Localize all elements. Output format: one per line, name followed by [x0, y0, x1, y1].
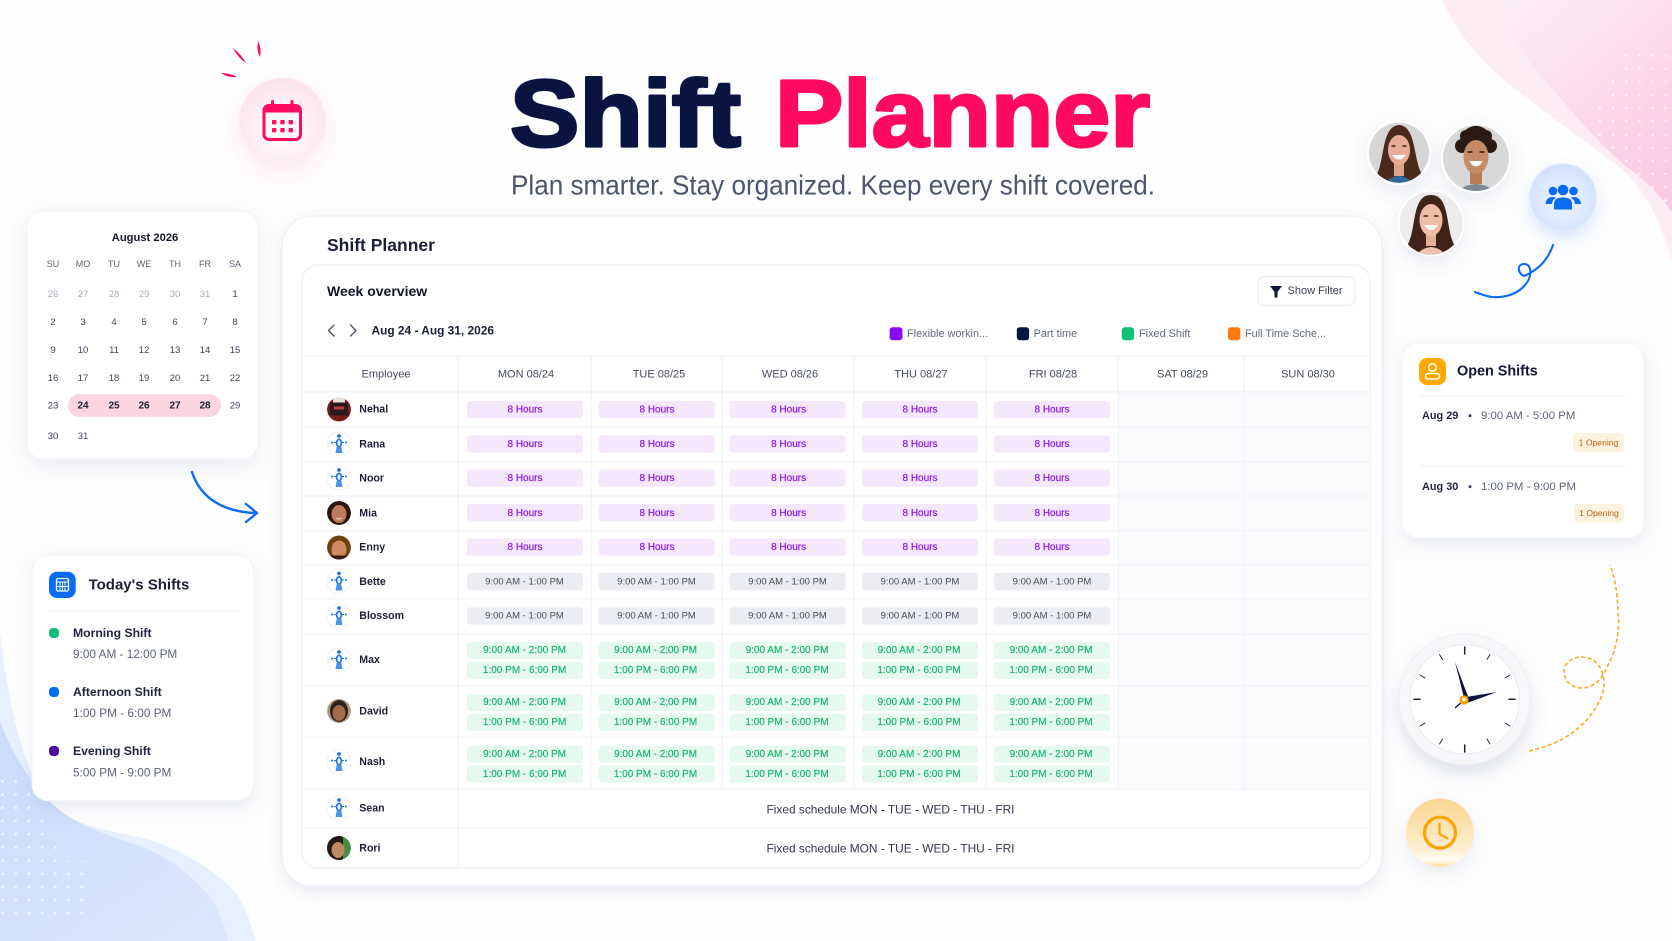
row: Nehal	[327, 398, 1110, 422]
row: David: 9:00 AM - 2:00 PM	[746, 697, 828, 708]
row: David	[327, 694, 1110, 731]
row: Blossom: 9:00 AM - 1:00 PM	[617, 610, 696, 622]
calendar dates: 22	[230, 373, 240, 384]
open shift: Aug 29	[1422, 410, 1624, 452]
open shift: Aug 29: 9:00 AM - 5:00 PM	[1481, 410, 1575, 422]
row: David: 9:00 AM - 2:00 PM	[878, 697, 960, 708]
row: Max: 1:00 PM - 6:00 PM	[745, 665, 829, 676]
row: Enny	[327, 536, 1110, 560]
legend: Fixed Shift	[1139, 328, 1190, 340]
heading: Today's Shifts	[89, 576, 189, 594]
row: Rori	[327, 836, 1014, 860]
arrow: orange dashed loop	[1529, 565, 1619, 751]
subtitle: Plan smarter. Stay organized. Keep every shift covered.	[511, 170, 1155, 200]
open shift: Aug 30: 1 Opening	[1579, 508, 1619, 518]
row: Nehal: Nehal	[359, 404, 388, 416]
table header: THU 08/27	[894, 368, 948, 380]
row: Rana: 8 Hours	[902, 439, 938, 450]
row: Nash: 1:00 PM - 6:00 PM	[614, 769, 697, 780]
weekday labels: SU	[47, 259, 59, 269]
row: Max: 9:00 AM - 2:00 PM	[614, 645, 697, 656]
row: Enny: 8 Hours	[639, 542, 675, 553]
row: Noor: 8 Hours	[902, 473, 938, 484]
calendar dates: 16	[48, 373, 58, 384]
row: Max: 1:00 PM - 6:00 PM	[877, 665, 961, 676]
calendar dates: 17	[78, 373, 88, 384]
calendar dates: 18	[109, 373, 119, 384]
row: Bette: 9:00 AM - 1:00 PM	[748, 576, 827, 587]
calendar dates: 2	[50, 317, 56, 328]
row: Blossom: 9:00 AM - 1:00 PM	[748, 610, 827, 622]
row: Enny: 8 Hours	[771, 542, 806, 553]
row: Noor	[327, 466, 1110, 490]
table header: Employee	[362, 368, 410, 380]
panel: week overview	[302, 265, 1370, 868]
row: Blossom: Blossom	[359, 610, 404, 622]
morning shift: 9:00 AM - 12:00 PM	[73, 647, 177, 661]
calendar dates: 31	[200, 289, 210, 300]
calendar dates: 25	[108, 400, 120, 412]
row: Nash: 1:00 PM - 6:00 PM	[745, 769, 829, 780]
calendar dates: 19	[139, 373, 149, 384]
calendar dates: 28	[109, 289, 119, 300]
row: Noor: Noor	[359, 472, 384, 484]
afternoon shift	[49, 685, 171, 720]
table header	[362, 368, 1335, 380]
panel: Shift Planner main	[282, 216, 1382, 886]
weekday labels: TU	[108, 259, 120, 269]
row: David: 1:00 PM - 6:00 PM	[877, 717, 961, 728]
panel: Open Shifts	[1402, 343, 1644, 538]
row: Rori: Fixed schedule MON - TUE - WED - THU - FRI	[767, 842, 1014, 856]
evening shift: 5:00 PM - 9:00 PM	[73, 766, 171, 780]
row: Mia: Mia	[359, 507, 377, 519]
icon: pink calendar badge	[221, 41, 326, 164]
avatar: woman two	[1398, 190, 1466, 260]
weekday labels	[47, 259, 241, 269]
calendar dates: 27	[78, 289, 88, 300]
row: Noor: 8 Hours	[639, 473, 675, 484]
row: Max: 1:00 PM - 6:00 PM	[614, 665, 697, 676]
table header: SAT 08/29	[1157, 368, 1208, 380]
open shift: Aug 30: Aug 30	[1422, 481, 1458, 493]
row: Rana: 8 Hours	[771, 439, 806, 450]
morning shift	[49, 626, 177, 661]
row: David: 1:00 PM - 6:00 PM	[483, 717, 566, 728]
row: Nash	[327, 746, 1110, 782]
icon: wall clock	[1399, 634, 1530, 765]
icon: team badge	[1530, 164, 1596, 230]
selected week highlight	[68, 394, 221, 417]
row: Nash: 9:00 AM - 2:00 PM	[1010, 749, 1092, 760]
show filter button: Show Filter	[1288, 285, 1343, 297]
row: Mia: 8 Hours	[1034, 508, 1070, 519]
row: Sean	[327, 796, 1014, 820]
row: Nash: 9:00 AM - 2:00 PM	[483, 749, 566, 760]
row: Nash: 9:00 AM - 2:00 PM	[746, 749, 828, 760]
legend: Part time	[1034, 328, 1077, 340]
planner heading: Shift Planner	[327, 235, 435, 255]
row: Rana: Rana	[359, 438, 385, 450]
calendar dates: 21	[200, 373, 210, 384]
calendar dates: 26	[48, 289, 58, 300]
calendar dates: 12	[139, 345, 149, 356]
row: David: 1:00 PM - 6:00 PM	[614, 717, 697, 728]
calendar dates: 9	[50, 345, 56, 356]
row: Mia: 8 Hours	[902, 508, 938, 519]
row: Nehal: 8 Hours	[771, 404, 806, 415]
arrow: blue curved arrow to planner	[192, 472, 257, 522]
calendar dates: 27	[169, 400, 181, 412]
row: Enny: 8 Hours	[1034, 542, 1070, 553]
row: Nash: 9:00 AM - 2:00 PM	[614, 749, 697, 760]
row: Rori: Rori	[359, 842, 381, 854]
weekend shading	[1118, 392, 1370, 789]
row: Rana: 8 Hours	[639, 439, 675, 450]
open shift: Aug 30	[1422, 481, 1624, 522]
row: David: 9:00 AM - 2:00 PM	[1010, 697, 1092, 708]
weekday labels: WE	[137, 259, 151, 269]
date navigation: Aug 24 - Aug 31, 2026	[372, 324, 494, 338]
row: Blossom: 9:00 AM - 1:00 PM	[881, 610, 959, 622]
calendar dates: 23	[48, 400, 58, 412]
afternoon shift: 1:00 PM - 6:00 PM	[73, 706, 171, 720]
row: Bette: 9:00 AM - 1:00 PM	[881, 576, 959, 587]
row: Mia: 8 Hours	[771, 508, 806, 519]
row: Max: 1:00 PM - 6:00 PM	[1009, 665, 1093, 676]
row: David: 9:00 AM - 2:00 PM	[614, 697, 697, 708]
legend: Flexible workin...	[907, 328, 988, 340]
weekday labels: MO	[76, 259, 90, 269]
row: Nehal: 8 Hours	[507, 404, 543, 415]
row: Bette: 9:00 AM - 1:00 PM	[485, 576, 564, 587]
row: Max: 9:00 AM - 2:00 PM	[1010, 645, 1092, 656]
row: Noor: 8 Hours	[507, 473, 543, 484]
row: Rana	[327, 432, 1110, 456]
calendar dates: 30	[48, 431, 58, 442]
row: Nehal: 8 Hours	[1034, 404, 1070, 415]
row: Max: Max	[359, 654, 380, 666]
row: Max: 9:00 AM - 2:00 PM	[483, 645, 566, 656]
row: Bette	[327, 570, 1110, 594]
row: Max: 1:00 PM - 6:00 PM	[483, 665, 566, 676]
calendar dates: 14	[200, 345, 210, 356]
legend	[890, 327, 1326, 340]
row: Sean: Fixed schedule MON - TUE - WED - THU - FRI	[767, 802, 1014, 816]
row: Nash: 1:00 PM - 6:00 PM	[483, 769, 566, 780]
team avatars	[1365, 120, 1512, 260]
show filter button	[1258, 277, 1355, 305]
calendar dates: 26	[138, 400, 150, 412]
row: Nash: 1:00 PM - 6:00 PM	[877, 769, 961, 780]
row: Nash: 9:00 AM - 2:00 PM	[878, 749, 960, 760]
row: Enny: 8 Hours	[507, 542, 543, 553]
row: Bette: 9:00 AM - 1:00 PM	[1013, 576, 1091, 587]
arrow: blue squiggle	[1475, 245, 1553, 297]
icon: blue calendar	[49, 572, 76, 598]
calendar dates: 5	[141, 317, 147, 328]
calendar dates: 15	[230, 345, 240, 356]
row: Rana: 8 Hours	[507, 439, 543, 450]
afternoon shift: Afternoon Shift	[73, 685, 162, 699]
row: Nehal: 8 Hours	[902, 404, 938, 415]
row: David: 1:00 PM - 6:00 PM	[1009, 717, 1093, 728]
weekday labels: FR	[199, 259, 211, 269]
evening shift	[49, 744, 171, 780]
week overview heading: Week overview	[327, 283, 427, 299]
row: Bette: Bette	[359, 576, 386, 588]
calendar dates: 8	[232, 317, 238, 328]
calendar dates: 24	[77, 400, 89, 412]
calendar dates: 6	[172, 317, 178, 328]
calendar dates: 28	[199, 400, 211, 412]
panel: Today's Shifts	[32, 555, 254, 801]
row: Noor: 8 Hours	[1034, 473, 1070, 484]
calendar dates: 11	[109, 345, 119, 356]
title	[510, 61, 1150, 167]
open shift: Aug 29: Aug 29	[1422, 410, 1458, 422]
row: Noor: 8 Hours	[771, 473, 806, 484]
icon: orange person	[1419, 358, 1446, 385]
row: Enny: Enny	[359, 542, 385, 554]
row: Nehal: 8 Hours	[639, 404, 675, 415]
calendar dates: 29	[230, 400, 240, 412]
row: Nash: 1:00 PM - 6:00 PM	[1009, 769, 1093, 780]
title: Shift	[510, 61, 741, 167]
calendar dates: 7	[202, 317, 208, 328]
calendar dates: 1	[232, 289, 238, 300]
calendar dates	[48, 289, 240, 442]
avatar: woman one	[1365, 120, 1435, 190]
evening shift: Evening Shift	[73, 744, 151, 758]
row: Enny: 8 Hours	[902, 542, 938, 553]
row: Mia: 8 Hours	[639, 508, 675, 519]
legend: Full Time Sche...	[1245, 328, 1326, 340]
row: Nash: Nash	[359, 756, 385, 768]
calendar heading: August 2026	[112, 232, 178, 244]
row: Blossom: 9:00 AM - 1:00 PM	[485, 610, 564, 622]
title: Planner	[775, 61, 1150, 167]
avatar: man with curly hair	[1440, 122, 1512, 195]
table header: FRI 08/28	[1029, 368, 1077, 380]
row: Sean: Sean	[359, 802, 385, 814]
row: Blossom: 9:00 AM - 1:00 PM	[1013, 610, 1091, 622]
panel: August 2026 calendar	[27, 211, 258, 459]
row: Mia	[327, 501, 1110, 525]
table header: WED 08/26	[762, 368, 818, 380]
row: Max	[327, 642, 1110, 679]
calendar dates: 3	[80, 317, 86, 328]
row: Blossom	[327, 604, 1110, 628]
row: David: 9:00 AM - 2:00 PM	[483, 697, 566, 708]
calendar dates: 31	[78, 431, 88, 442]
row: Max: 9:00 AM - 2:00 PM	[746, 645, 828, 656]
row: David: David	[359, 705, 388, 717]
weekday labels: TH	[169, 259, 181, 269]
weekday labels: SA	[229, 259, 241, 269]
calendar dates: 29	[139, 289, 149, 300]
open shift: Aug 29: 1 Opening	[1579, 438, 1619, 448]
calendar dates: 30	[170, 289, 180, 300]
icon: orange clock badge	[1406, 799, 1474, 867]
calendar dates: 4	[111, 317, 117, 328]
background: blue wave bottom left	[0, 633, 255, 941]
row: Bette: 9:00 AM - 1:00 PM	[617, 576, 696, 587]
table grid	[302, 356, 1370, 868]
row: Rana: 8 Hours	[1034, 439, 1070, 450]
calendar dates: 10	[78, 345, 88, 356]
table header: MON 08/24	[498, 368, 554, 380]
morning shift: Morning Shift	[73, 626, 152, 640]
table header: TUE 08/25	[633, 368, 685, 380]
row: David: 1:00 PM - 6:00 PM	[745, 717, 829, 728]
background: pink wave top right	[1442, 0, 1672, 262]
table header: SUN 08/30	[1281, 368, 1335, 380]
calendar dates: 13	[170, 345, 180, 356]
row: Mia: 8 Hours	[507, 508, 543, 519]
open shift: Aug 30: 1:00 PM - 9:00 PM	[1481, 481, 1576, 493]
row: Max: 9:00 AM - 2:00 PM	[878, 645, 960, 656]
heading: Open Shifts	[1457, 364, 1538, 380]
calendar dates: 20	[170, 373, 180, 384]
